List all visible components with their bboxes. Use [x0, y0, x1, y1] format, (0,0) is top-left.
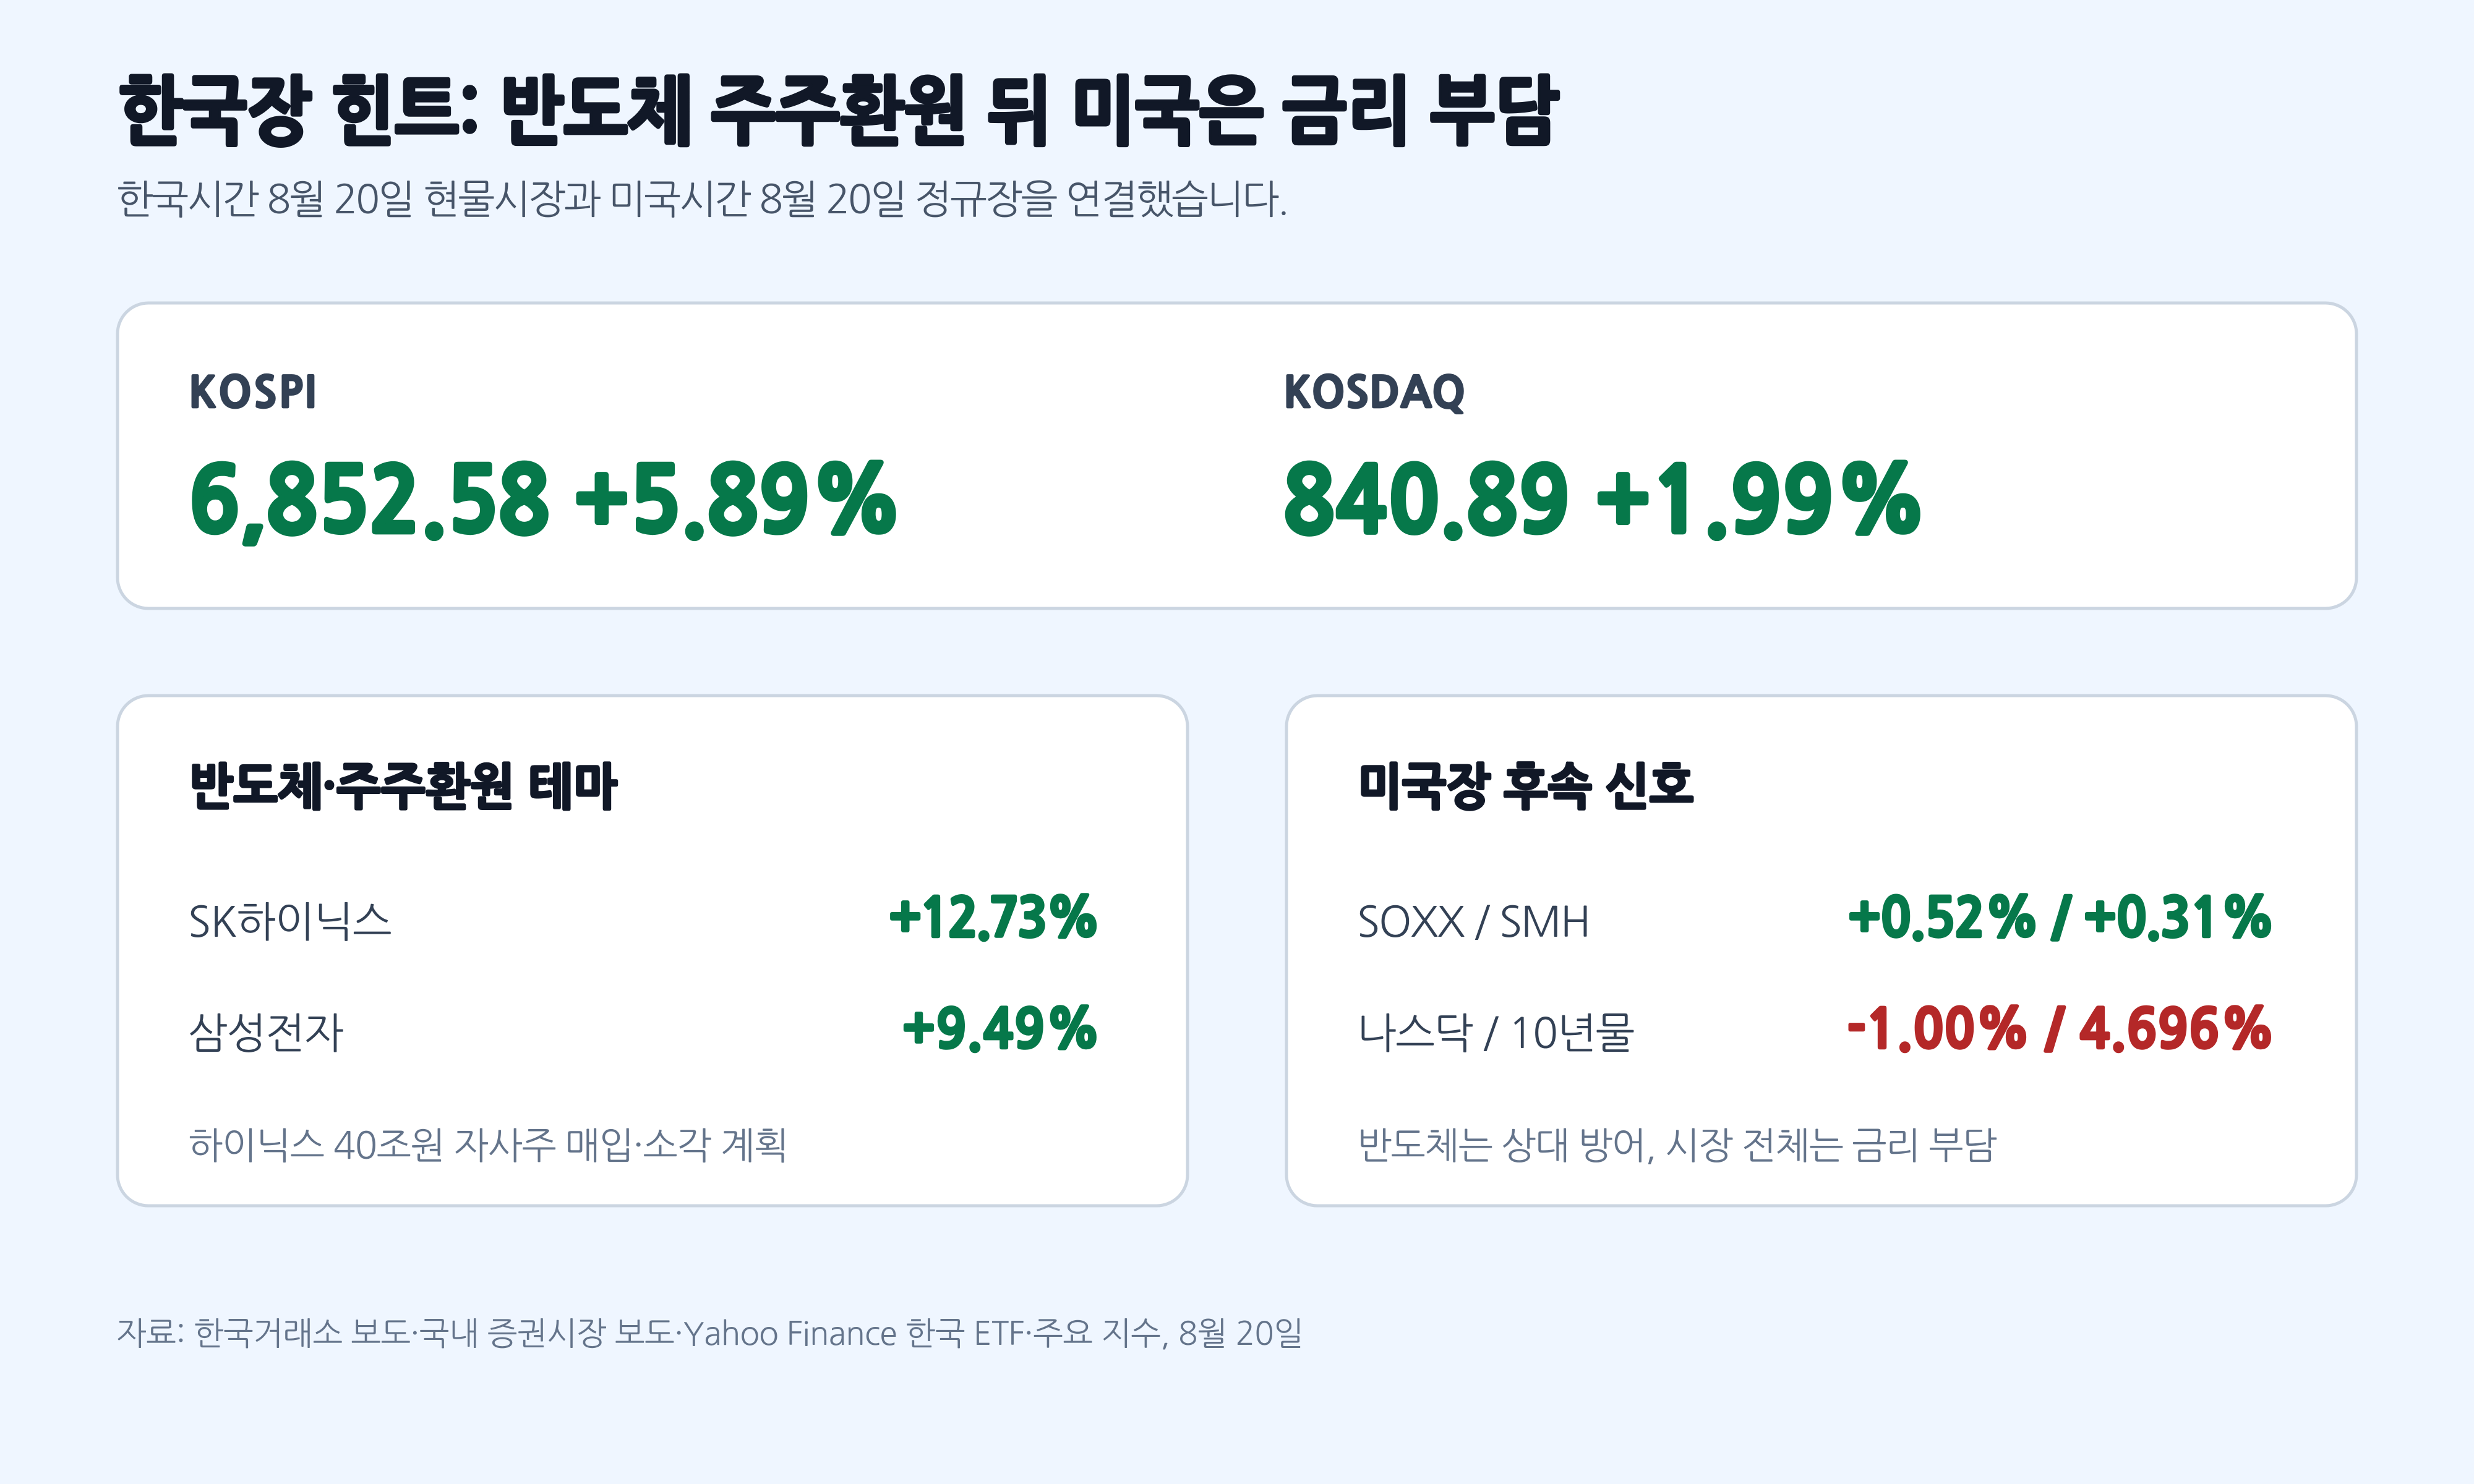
panel note: 반도체는 상대 방어, 시장 전체는 금리 부담: [1357, 1127, 1997, 1164]
source footnote: 자료: 한국거래소 보도·국내 증권시장 보도·Yahoo Finance 한국 ETF·주요 지수, 8월 20일: [116, 1318, 1303, 1350]
row: SOXX SMH value: +0.52% / +0.31%: [1848, 892, 2274, 945]
panel: index summary: [118, 303, 2356, 608]
row: SK hynix label: SK하이닉스: [188, 901, 392, 943]
row: SOXX SMH label: SOXX / SMH: [1357, 901, 1590, 943]
row: SK hynix value: +12.73%: [889, 892, 1098, 945]
row: Nasdaq 10Y label: 나스닥 / 10년물: [1357, 1012, 1634, 1054]
panel note: 하이닉스 40조원 자사주 매입·소각 계획: [188, 1127, 788, 1164]
KOSPI value: 6,852.58 +5.89%: [189, 457, 902, 546]
KOSDAQ label: KOSDAQ: [1284, 372, 1466, 414]
panel heading: 미국장 후속 신호: [1358, 762, 1693, 812]
row: Nasdaq 10Y value: -1.00% / 4.696%: [1847, 1003, 2275, 1056]
row: Samsung value: +9.49%: [902, 1003, 1101, 1056]
KOSDAQ value: 840.89 +1.99%: [1283, 457, 1927, 546]
panel: semiconductor theme: [118, 696, 1188, 1206]
panel: US follow-through signals: [1286, 696, 2356, 1206]
row: Samsung label: 삼성전자: [188, 1012, 343, 1054]
panel heading: 반도체·주주환원 테마: [189, 762, 618, 812]
KOSPI label: KOSPI: [189, 372, 318, 414]
subtitle: 한국시간 8월 20일 현물시장과 미국시간 8월 20일 정규장을 연결했습니다.: [116, 180, 1288, 220]
title: 한국장 힌트: 반도체 주주환원 뒤 미국은 금리 부담: [118, 74, 1559, 149]
